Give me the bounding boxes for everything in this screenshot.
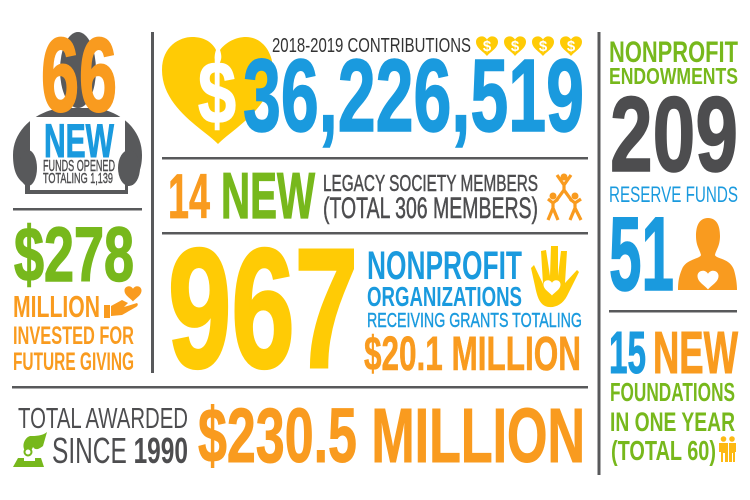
panel: 66 new funds [13,17,142,194]
text: future giving: FUTURE GIVING [13,348,134,376]
text: $20.1 million: $20.1 MILLION [364,328,581,381]
number: 967: 967 [168,214,358,404]
icon: person with heart [678,218,737,290]
text: NONPROFIT: NONPROFIT [367,244,522,288]
number: 51: 51 [609,196,674,313]
text: 2018-2019 contributions: 2018-2019 CONTRIBUTIONS [272,35,471,57]
icon: small dollar hearts: $ [511,38,520,55]
number: $278: $278 [14,212,134,298]
text: NEW: NEW [221,159,315,232]
number: 36,226,519: 36,226,519 [243,38,584,153]
panel: 967 nonprofit organizations [168,214,582,404]
icon: two people [719,436,736,462]
icon: hand with heart [531,246,579,307]
text: NEW: NEW [44,114,114,167]
text: total 306 members: (TOTAL 306 MEMBERS) [323,192,538,225]
panel: new foundations [609,320,738,466]
icon: three people [548,174,581,220]
panel: contributions [162,35,584,153]
text: ORGANIZATIONS: ORGANIZATIONS [367,281,522,312]
number: 66: 66 [41,17,117,134]
panel: total awarded [13,393,585,479]
panel: 278 million invested [13,212,142,376]
icon: person holding sign [13,32,142,194]
text: since 1990: SINCE 1990 [52,430,188,471]
icon: heart with dollar: $ [198,43,236,142]
text: receiving grants totaling: RECEIVING GRANTS TOTALING [367,310,582,332]
text: invested for: INVESTED FOR [13,322,134,350]
icon: small dollar hearts: $ [567,38,576,55]
number: 14: 14 [168,162,210,232]
icon: small dollar hearts [476,36,582,56]
text: legacy society members: LEGACY SOCIETY MEMBERS [323,170,538,196]
icon: heart with dollar [162,37,273,144]
icon: hand with heart [104,286,142,318]
icon: hand dropping ballot [13,432,47,467]
text: totaling: TOTALING 1,139 [43,171,113,187]
text: total awarded: TOTAL AWARDED [18,403,188,435]
panel: nonprofit endowments [609,36,738,313]
text: funds opened: FUNDS OPENED [43,158,115,175]
icon: small dollar hearts: $ [483,38,492,55]
icon: small dollar hearts: $ [539,38,548,55]
number: 15: 15 [609,320,646,386]
panel: legacy society [168,159,581,232]
text: MILLION: MILLION [13,289,100,324]
